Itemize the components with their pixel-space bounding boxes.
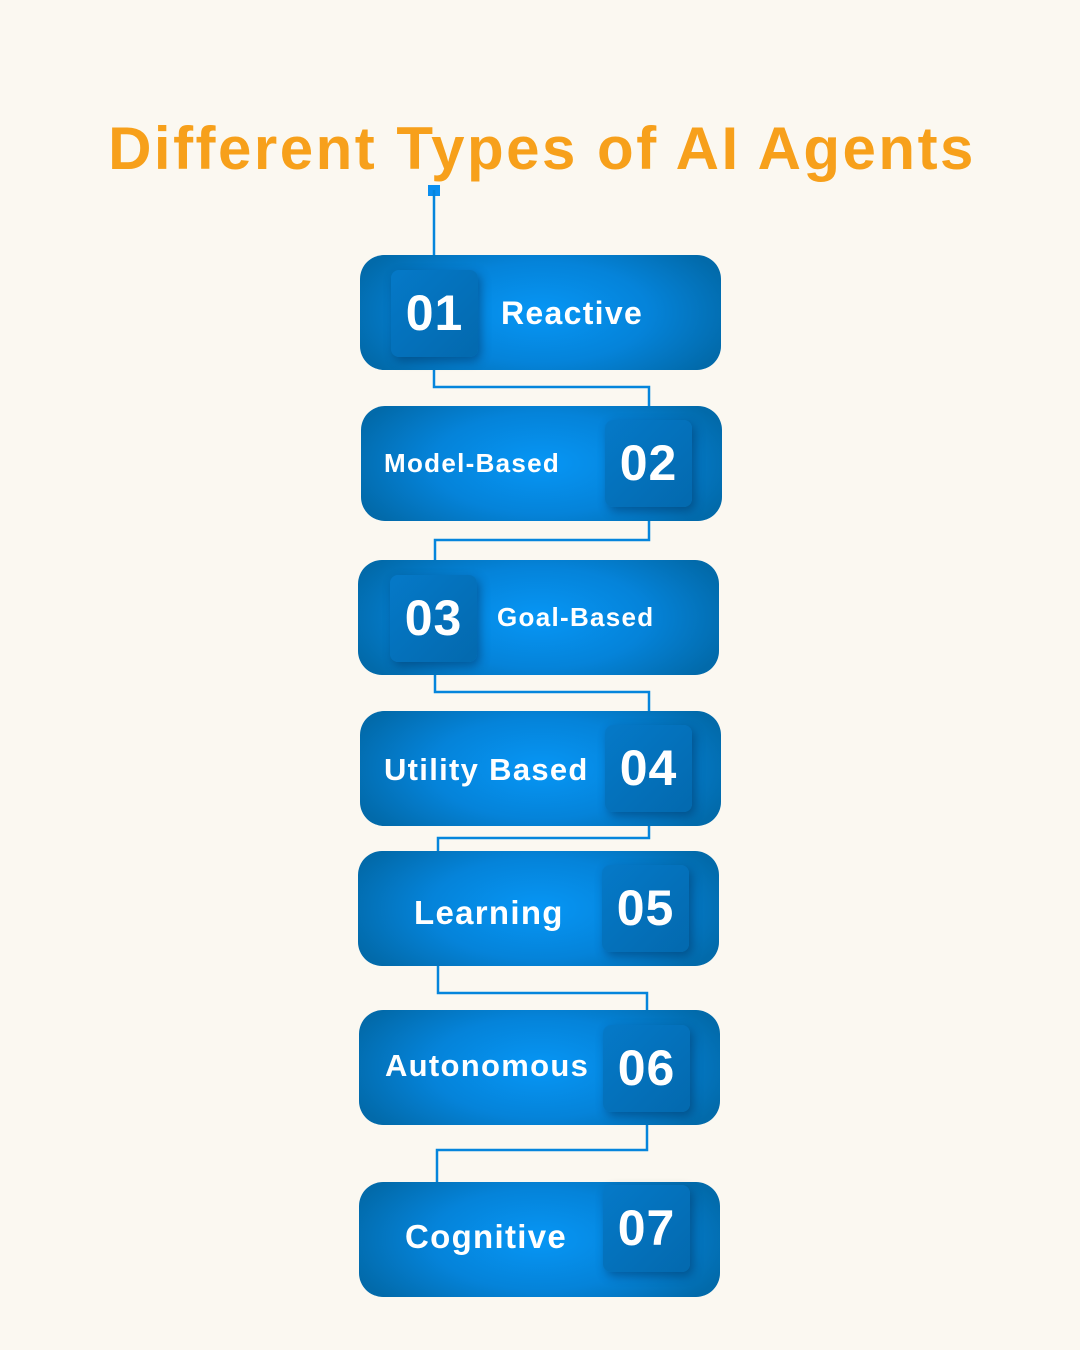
card 02 [361,406,722,521]
card 07: 07 [618,1200,675,1256]
card 03: Goal-Based [497,602,654,632]
card 06 [359,1010,720,1125]
card 06: Autonomous [385,1048,589,1083]
card 07: Cognitive [405,1218,567,1255]
title: Different Types of AI Agents [108,115,976,182]
card 04: 04 [620,740,677,796]
card 04: Utility Based [384,752,589,787]
card 02: Model-Based [384,448,560,478]
card 06: 06 [618,1040,675,1096]
card 01 [360,255,721,370]
card 01: Reactive [501,295,643,331]
card 07 [359,1182,720,1297]
card 03: 03 [405,590,462,646]
card 05: Learning [414,894,564,931]
card 01: 01 [406,285,463,341]
card 04 [360,711,721,826]
card 05: 05 [617,880,674,936]
card 05 [358,851,719,966]
card 03 [358,560,719,675]
card 02: 02 [620,435,677,491]
